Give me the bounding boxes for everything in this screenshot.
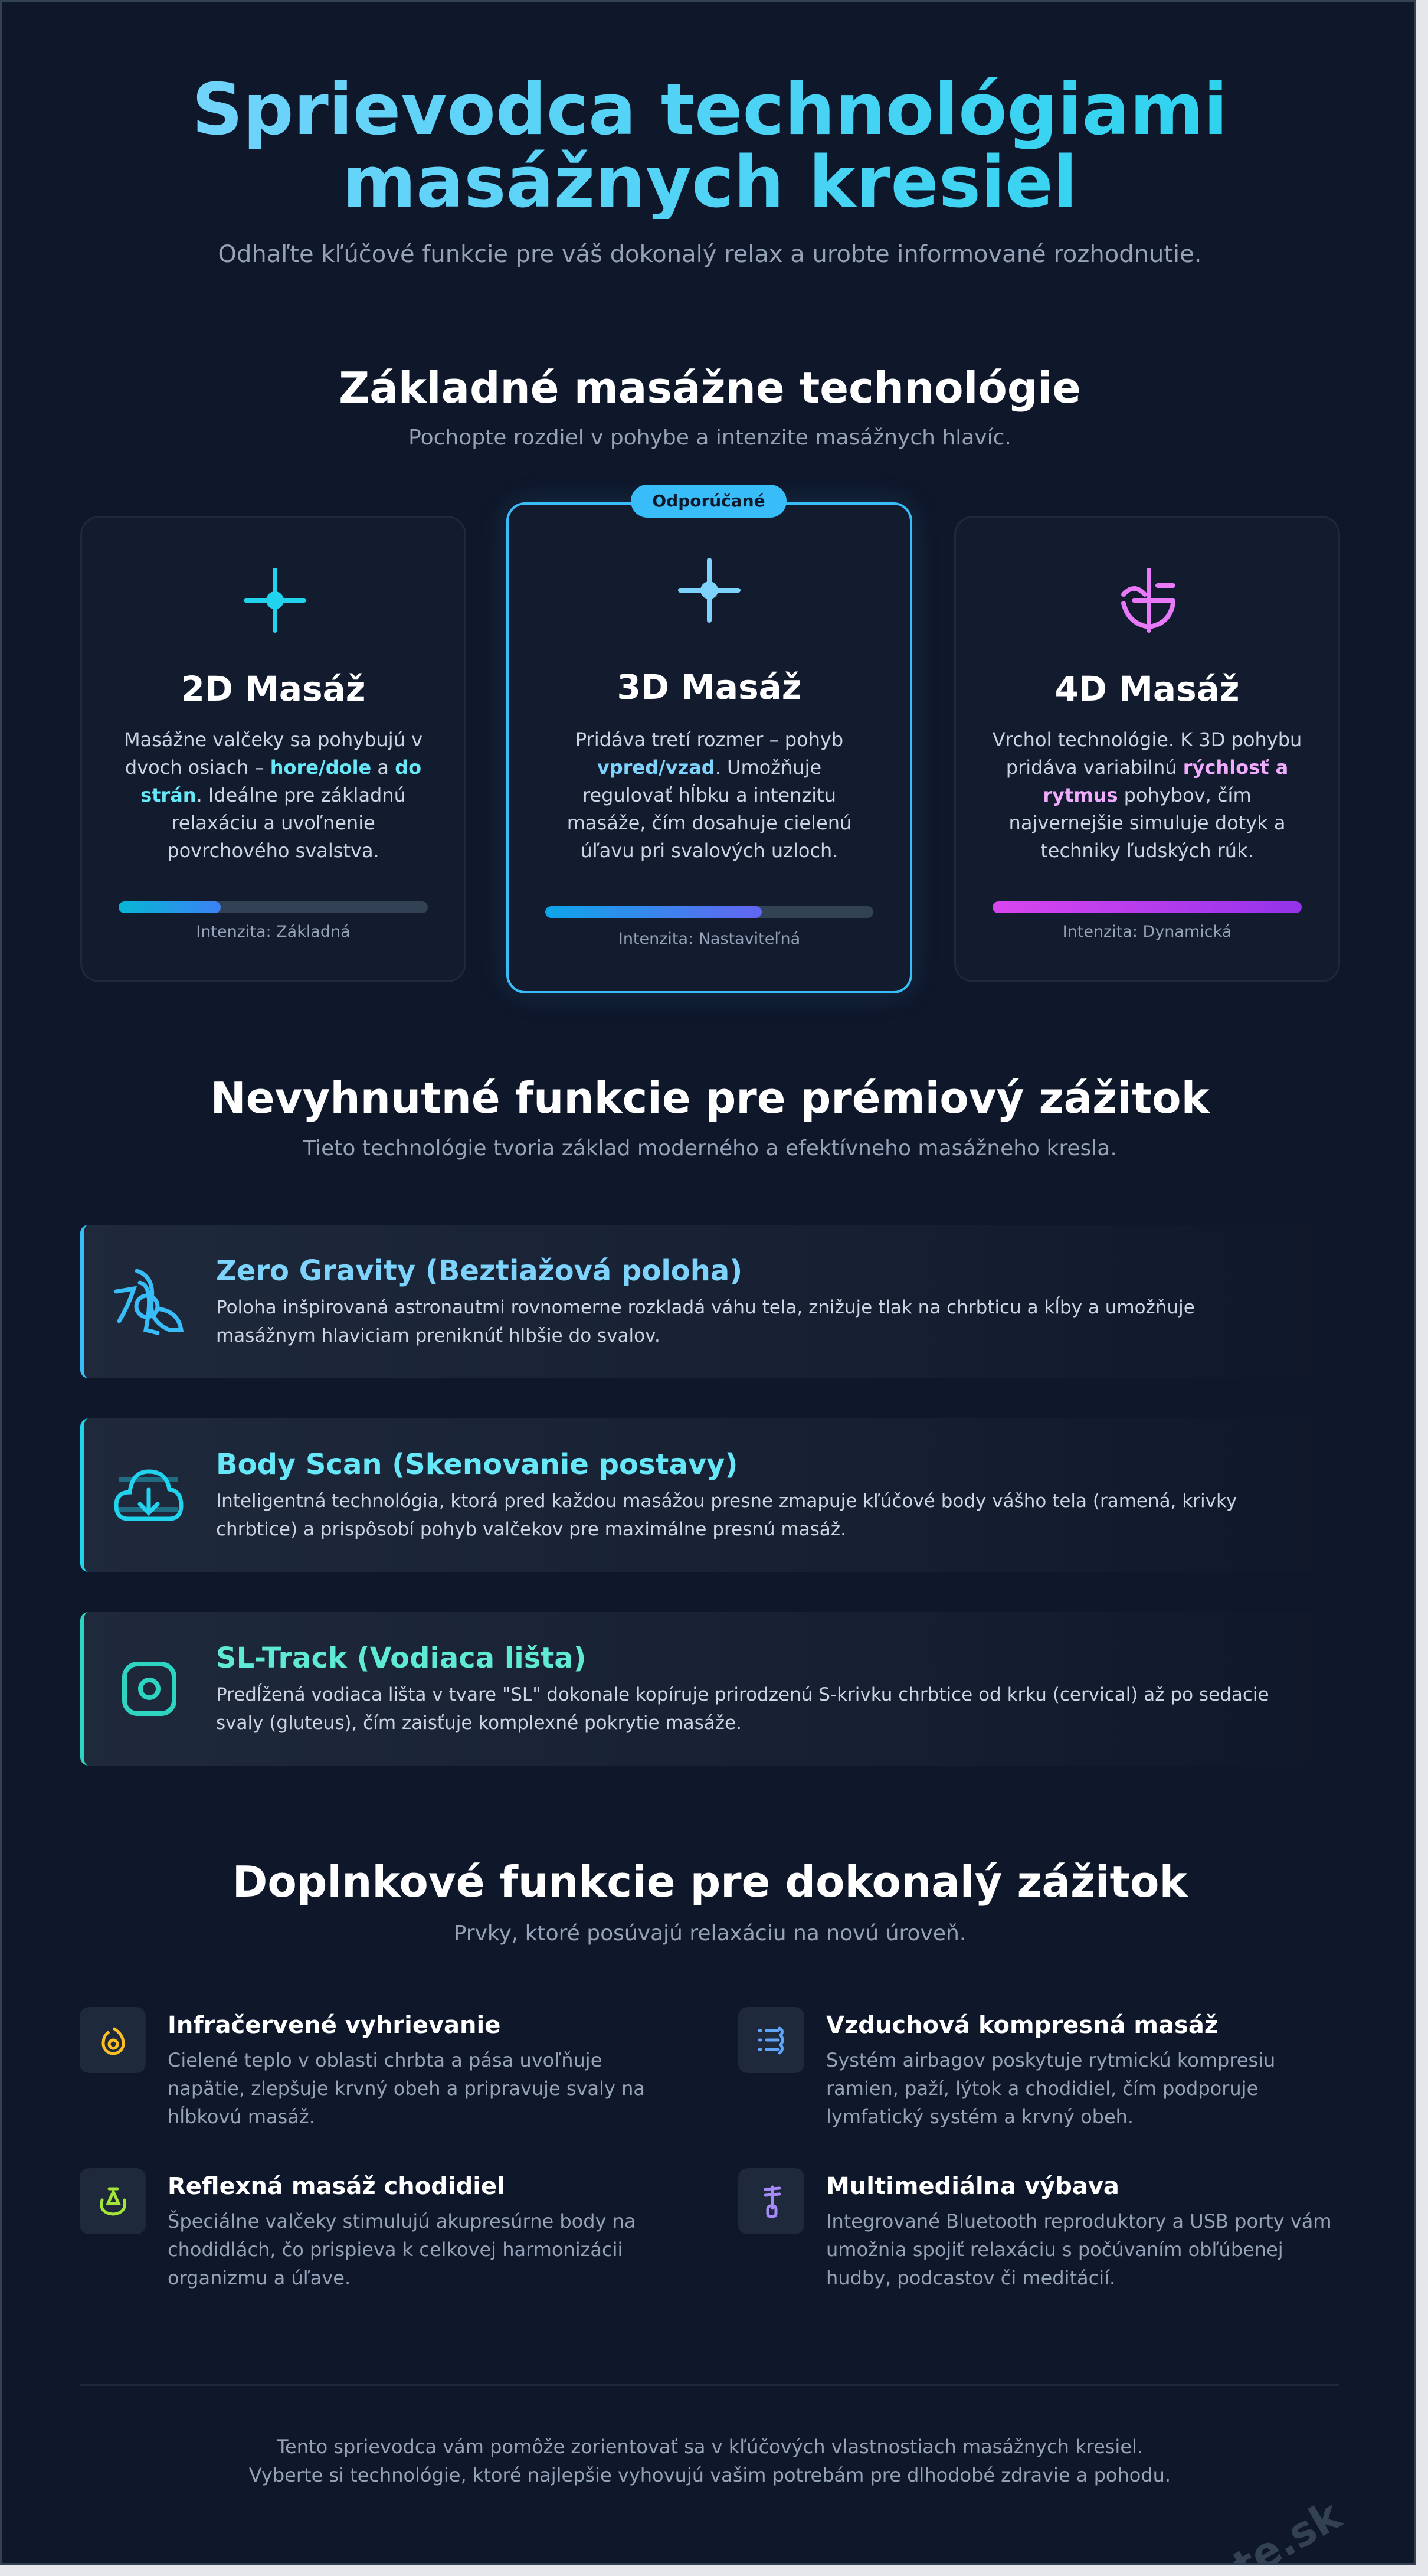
item text: Špeciálne valčeky stimulujú akupresúrne body na chodidlách, čo prispieva k celkovej harmonizácii organizmu a úľave.: [168, 2210, 636, 2289]
heading: additional features: Doplnkové funkcie pre dokonalý zážitok: [232, 1857, 1187, 1907]
icon: air: [738, 2007, 804, 2073]
icon: zero gravity: [114, 1269, 184, 1335]
badge: Odporúčané: [652, 491, 765, 511]
card title: 2D Masáž: [181, 669, 365, 709]
feature text: Inteligentná technológia, ktorá pred každou masážou presne zmapuje kľúčové body vášho tela (ramená, krivky chrbtice) a prispôsobí pohyb valčekov pre maximálne presnú masáž.: [216, 1490, 1237, 1540]
intensity label: Intenzita: Základná: [196, 923, 351, 941]
feature: SL-track: [80, 1612, 1339, 1766]
intensity bar: [993, 901, 1302, 913]
icon: SL track: [122, 1662, 176, 1716]
item text: Systém airbagov poskytuje rytmickú kompresiu ramien, paží, lýtok a chodidiel, čím podporuje lymfatický systém a krvný obeh.: [826, 2049, 1275, 2128]
item title: Multimediálna výbava: [826, 2173, 1119, 2200]
item: air compression: [738, 2007, 1275, 2128]
feature title: SL-Track (Vodiaca lišta): [216, 1642, 587, 1675]
item text: Integrované Bluetooth reproduktory a USB porty vám umožnia spojiť relaxáciu s počúvaním obľúbenej hudby, podcastov či meditácií.: [826, 2210, 1332, 2289]
subheading: Prvky, ktoré posúvajú relaxáciu na novú úroveň.: [454, 1921, 966, 1946]
item text: Cielené teplo v oblasti chrbta a pása uvoľňuje napätie, zlepšuje krvný obeh a pripravuje svaly na hĺbkovú masáž.: [168, 2049, 645, 2128]
subtitle: Odhaľte kľúčové funkcie pre váš dokonalý relax a urobte informované rozhodnutie.: [218, 241, 1201, 268]
item title: Vzduchová kompresná masáž: [826, 2012, 1218, 2039]
subheading: Tieto technológie tvoria základ moderného a efektívneho masážneho kresla.: [303, 1136, 1117, 1160]
icon: heat: [80, 2007, 146, 2073]
intensity bar: [119, 901, 428, 913]
title: [2, 74, 1418, 219]
footer text: [249, 2436, 1171, 2486]
card text: Masážne valčeky sa pohybujú v dvoch osiach – hore/dole a do strán. Ideálne pre základnú relaxáciu a uvoľnenie povrchového svalstva.: [124, 728, 422, 862]
heading: premium features: Nevyhnutné funkcie pre prémiový zážitok: [210, 1073, 1210, 1123]
heading: basic technologies: Základné masážne technológie: [339, 363, 1081, 413]
icon: 4D: [1121, 568, 1175, 633]
item: infrared heating: [80, 2007, 645, 2128]
card title: 4D Masáž: [1055, 669, 1239, 709]
item: foot reflex massage: [80, 2168, 636, 2289]
icon: 3D cross: [678, 558, 741, 623]
card text: Pridáva tretí rozmer – pohyb vpred/vzad. Umožňuje regulovať hĺbku a intenzitu masáže, čím dosahuje cielenú úľavu pri svalových uzloch.: [567, 728, 851, 862]
item title: Reflexná masáž chodidiel: [168, 2173, 505, 2200]
icon: usb: [738, 2168, 804, 2234]
feature text: Poloha inšpirovaná astronautmi rovnomerne rozkladá váhu tela, znižuje tlak na chrbticu a kĺby a umožňuje masážnym hlaviciam preniknúť hlbšie do svalov.: [216, 1297, 1195, 1346]
title: masážnych kresiel: [342, 142, 1077, 224]
icon: body scan: [114, 1470, 183, 1521]
feature: zero gravity: [80, 1225, 1339, 1378]
panel: 3D recommended: [506, 502, 912, 993]
subheading: Pochopte rozdiel v pohybe a intenzite masážnych hlavíc.: [408, 426, 1011, 450]
icon: foot: [80, 2168, 146, 2234]
panel: 4D: [954, 516, 1340, 982]
badge: [631, 485, 787, 518]
icon: 2D cross: [244, 568, 306, 633]
panel: 2D: [80, 516, 466, 982]
intensity label: Intenzita: Dynamická: [1063, 923, 1232, 941]
footer text: Vyberte si technológie, ktoré najlepšie vyhovujú vašim potrebám pre dlhodobé zdravie a pohodu.: [249, 2464, 1171, 2486]
title: Sprievodca technológiami: [192, 69, 1228, 151]
card title: 3D Masáž: [617, 667, 801, 707]
card text: Vrchol technológie. K 3D pohybu pridáva variabilnú rýchlosť a rytmus pohybov, čím najvernejšie simuluje dotyk a techniky ľudských rúk.: [993, 728, 1302, 862]
item title: Infračervené vyhrievanie: [168, 2012, 500, 2039]
feature text: Predĺžená vodiaca lišta v tvare "SL" dokonale kopíruje prirodzenú S-krivku chrbtice od krku (cervical) až po sedacie svaly (gluteus), čím zaisťuje komplexné pokrytie masáže.: [216, 1684, 1269, 1734]
item: multimedia: [738, 2168, 1332, 2289]
feature title: Zero Gravity (Beztiažová poloha): [216, 1254, 742, 1287]
feature: body scan: [80, 1418, 1339, 1572]
footer text: Tento sprievodca vám pomôže zorientovať sa v kľúčových vlastnostiach masážnych kresiel.: [277, 2436, 1143, 2458]
intensity bar: [545, 906, 873, 918]
intensity label: Intenzita: Nastaviteľná: [618, 930, 800, 948]
feature title: Body Scan (Skenovanie postavy): [216, 1448, 738, 1481]
